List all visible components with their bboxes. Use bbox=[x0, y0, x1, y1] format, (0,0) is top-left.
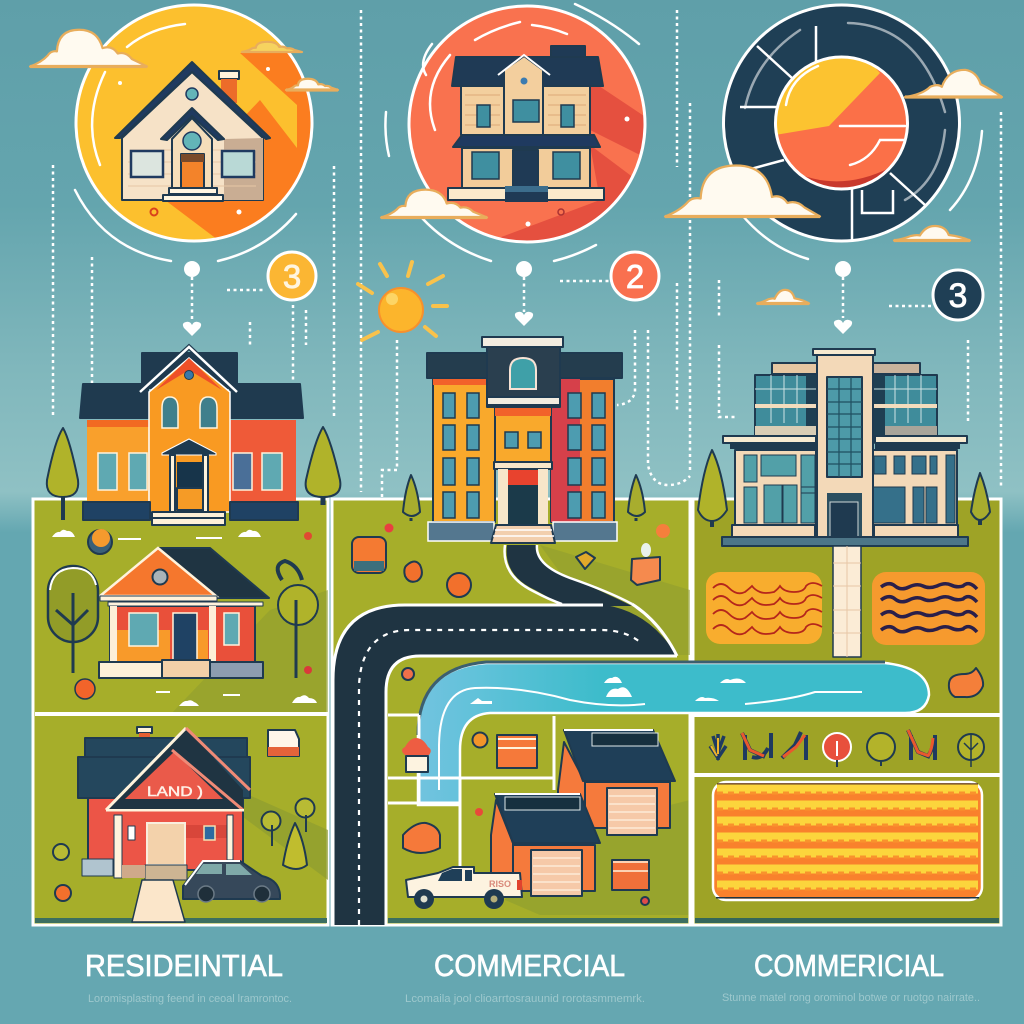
plants row bbox=[710, 730, 984, 767]
tree: right of residential bbox=[306, 427, 340, 505]
building: lower residential house bbox=[99, 548, 269, 678]
tree: left of office bbox=[698, 450, 727, 527]
tree: left of residential bbox=[47, 428, 78, 520]
lawn balls bbox=[75, 529, 312, 699]
lawn objects around road bbox=[352, 524, 670, 597]
icon: cottage bbox=[115, 62, 270, 201]
cloud: below dark circle bbox=[894, 226, 970, 240]
pickup truck bbox=[406, 867, 522, 909]
crates and lawn objects bbox=[402, 668, 649, 905]
cloud: large left of dark circle bbox=[665, 166, 820, 216]
icon: two storey house bbox=[448, 46, 604, 202]
caption: commercial: Lcomaila jool clioarrtosrauunid rorotasmmemrk. bbox=[405, 993, 645, 1005]
panel: second commercial land bbox=[693, 499, 1001, 925]
tree: right of office bbox=[971, 473, 990, 525]
label on house: LAND ) bbox=[147, 783, 203, 799]
cloud: below coral circle bbox=[381, 190, 487, 218]
badge: number 2 coral: 2 bbox=[626, 258, 644, 295]
building: commercial apartments bbox=[427, 337, 622, 543]
badge: number 2 coral bbox=[611, 252, 659, 300]
panel: residential land bbox=[33, 499, 328, 925]
building: residential main house bbox=[80, 347, 303, 525]
tree: round right bbox=[278, 561, 318, 678]
circle: apartment house bbox=[385, 4, 650, 261]
badge: number 3 yellow: 3 bbox=[283, 258, 301, 295]
cloud: small on yellow circle bbox=[242, 42, 302, 52]
circle: residential house bbox=[75, 5, 320, 261]
panel: commercial land bbox=[332, 499, 690, 925]
caption: residential: Loromisplasting feend in ceoal lramrontoc. bbox=[88, 993, 292, 1005]
pin connector: second commercial bbox=[834, 261, 852, 334]
car bbox=[183, 861, 280, 902]
dotted connector lines bbox=[53, 10, 1001, 510]
walking path bbox=[132, 880, 185, 922]
walkway bbox=[833, 546, 861, 657]
circle: dark pie chart bbox=[724, 5, 960, 241]
badge: number 3 dark bbox=[933, 270, 983, 320]
road bbox=[333, 545, 677, 925]
badge: number 3 yellow bbox=[268, 252, 316, 300]
icon: sun bbox=[358, 262, 447, 340]
cloud: right of dark circle bbox=[905, 70, 1002, 97]
garage: back bbox=[558, 730, 675, 835]
building: commercial office bbox=[722, 349, 968, 546]
land parcel grid lines bbox=[388, 715, 690, 925]
tree: left of apartments bbox=[403, 475, 420, 521]
cloud: top left bbox=[30, 30, 147, 66]
caption: second commercial: Stunne matel rong orominol botwe or ruotgo nairrate.. bbox=[722, 992, 980, 1004]
heading: commercial: COMMERCIAL bbox=[434, 948, 625, 983]
badge: number 3 dark: 3 bbox=[949, 277, 967, 315]
heading: second commercial: COMMERICIAL bbox=[754, 948, 944, 983]
tree: round left bbox=[48, 566, 98, 673]
objects: bottom left lawn bbox=[53, 730, 314, 901]
wave plot: left bbox=[706, 572, 822, 644]
building: bottom left house bbox=[78, 727, 250, 880]
icon: pig shaped object bbox=[949, 668, 983, 697]
garage: front bbox=[491, 794, 600, 896]
swoosh arcs around dark circle bbox=[742, 131, 982, 259]
cloud: small right of yellow circle bbox=[286, 79, 338, 90]
heading: residential: RESIDEINTIAL bbox=[85, 948, 283, 983]
wave plot: right bbox=[872, 572, 985, 645]
tree: right of apartments bbox=[628, 475, 645, 521]
pin connector: residential bbox=[183, 261, 201, 336]
pin connector: commercial bbox=[515, 261, 533, 326]
pickup truck: RISO bbox=[489, 879, 511, 889]
lake bbox=[418, 662, 929, 805]
cloud: small mid right bbox=[757, 290, 809, 304]
crop field bbox=[713, 782, 982, 900]
